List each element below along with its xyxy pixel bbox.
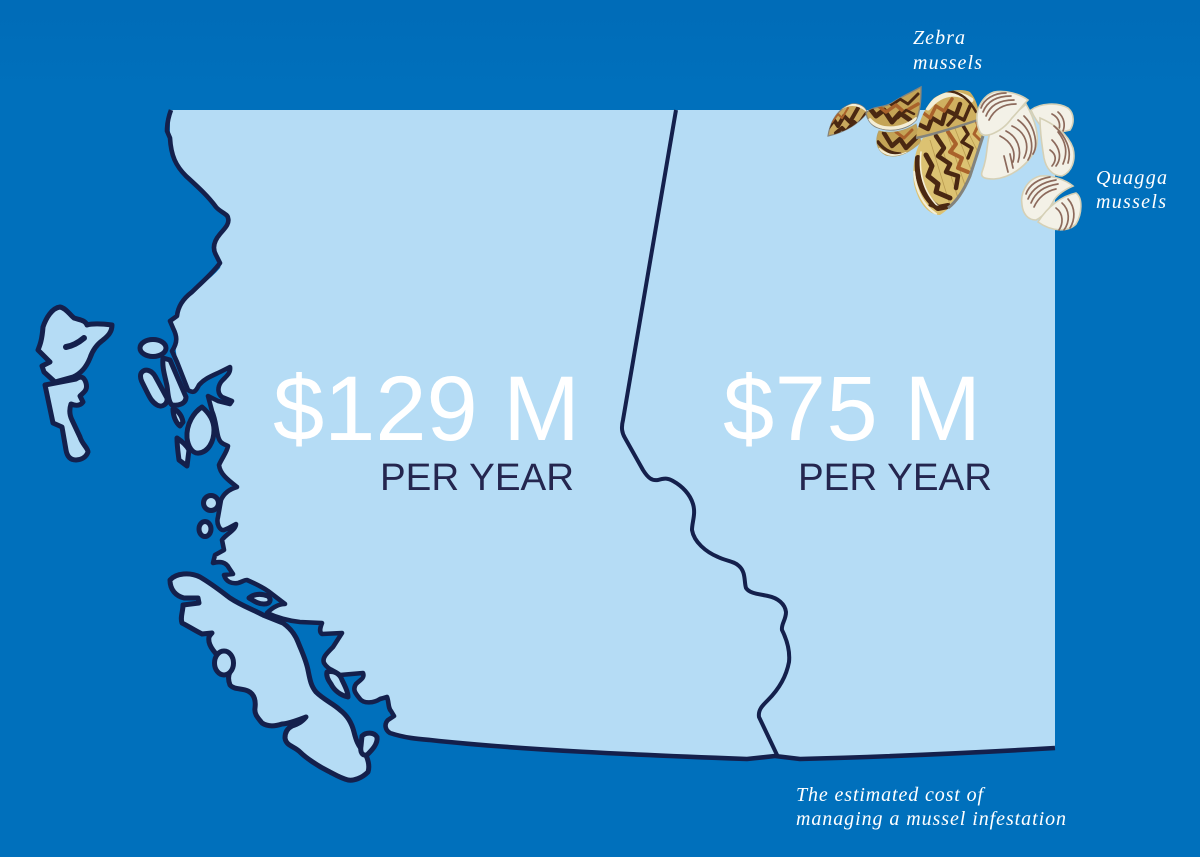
label: quagga mussels second line: mussels: [1096, 191, 1166, 213]
label: zebra mussels second line: mussels: [913, 52, 982, 74]
zebra mussel: upper middle: [866, 87, 921, 130]
Vancouver Island: [170, 574, 369, 780]
zebra mussel: lower middle: [877, 124, 921, 156]
water cutout: coastal shelf: [0, 108, 430, 857]
zebra mussel: small left: [828, 104, 867, 136]
zebra mussels: [828, 87, 983, 215]
islet: Gulf Islands: [361, 733, 377, 755]
quagga mussel: lower right: [1038, 193, 1081, 230]
cost label: British Columbia: [273, 358, 580, 499]
caption: The estimated cost of: [796, 784, 985, 806]
Haida Gwaii south island: [45, 377, 88, 460]
coastal islet: round: [204, 496, 218, 510]
islet: Strait of Georgia middle: [327, 671, 348, 697]
per year: PER YEAR: [798, 457, 992, 499]
coastal island: teardrop: [187, 407, 214, 453]
caption second line: managing a mussel infestation: [796, 808, 1066, 830]
quagga mussel: large: [982, 104, 1037, 179]
Haida Gwaii inlet: [66, 338, 84, 347]
cost label: Alberta: [723, 358, 992, 499]
islet: Strait of Georgia north: [249, 594, 270, 604]
land mass: [170, 110, 1055, 759]
boundary between British Columbia and Alberta: [622, 110, 789, 757]
quagga mussel: lower left: [1022, 176, 1073, 220]
coastline: mainland: [167, 110, 1055, 759]
coastal islet: small round: [199, 522, 211, 536]
zebra mussel: top of large: [916, 90, 979, 138]
coastal island: long: [163, 358, 186, 405]
coastal islet: upper: [173, 409, 183, 426]
Haida Gwaii north island: [38, 307, 112, 382]
per year: PER YEAR: [380, 457, 574, 499]
coastal island: capsule: [140, 370, 167, 406]
quagga mussel: right: [1040, 118, 1074, 176]
Vancouver Island lake: [214, 651, 234, 675]
coastal island: oval: [140, 340, 166, 356]
quagga mussel: upper right back: [1031, 104, 1073, 134]
coastal islet: lower: [177, 438, 189, 466]
amount: $75 M: [723, 358, 981, 460]
label: quagga mussels: Quagga: [1096, 167, 1167, 189]
label: zebra mussels: Zebra: [913, 27, 965, 49]
quagga mussels: [977, 91, 1081, 230]
quagga mussel: top: [977, 91, 1028, 135]
zebra mussel: large: [913, 108, 983, 215]
amount: $129 M: [273, 358, 580, 460]
